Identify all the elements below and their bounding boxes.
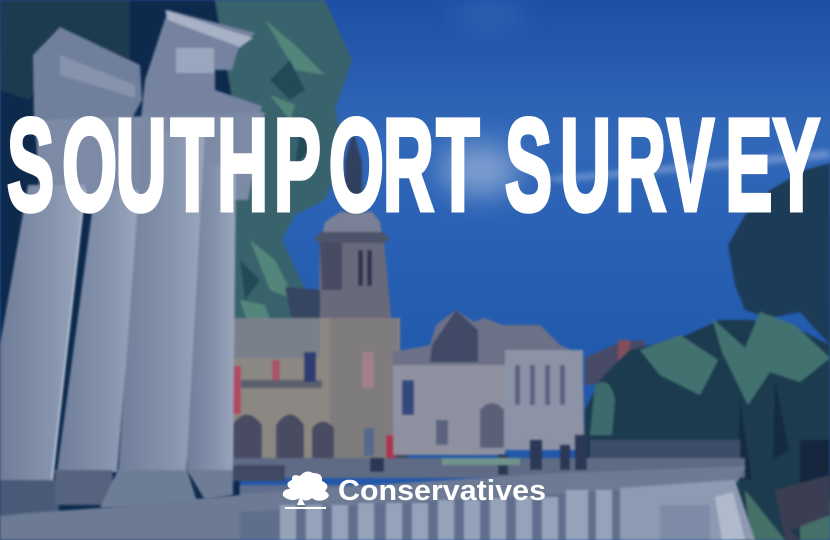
photo: stone colonnade columns	[0, 10, 265, 515]
icon: oak tree	[283, 472, 329, 509]
photo: stone balustrade and pedestal	[0, 466, 755, 540]
photo: foliage behind colonnade	[0, 0, 352, 540]
logo: Conservatives	[283, 472, 546, 509]
photo: neighbouring Victorian building	[393, 310, 645, 455]
photo: town hall building with clock tower	[228, 130, 408, 468]
logo wordmark: Conservatives	[338, 475, 546, 507]
photo: palm trees and garden foliage	[585, 163, 830, 540]
photo: plaza with people	[225, 435, 745, 481]
title: SOUTHPORT SURVEY	[7, 93, 820, 239]
photo: wooden bench	[775, 475, 830, 540]
